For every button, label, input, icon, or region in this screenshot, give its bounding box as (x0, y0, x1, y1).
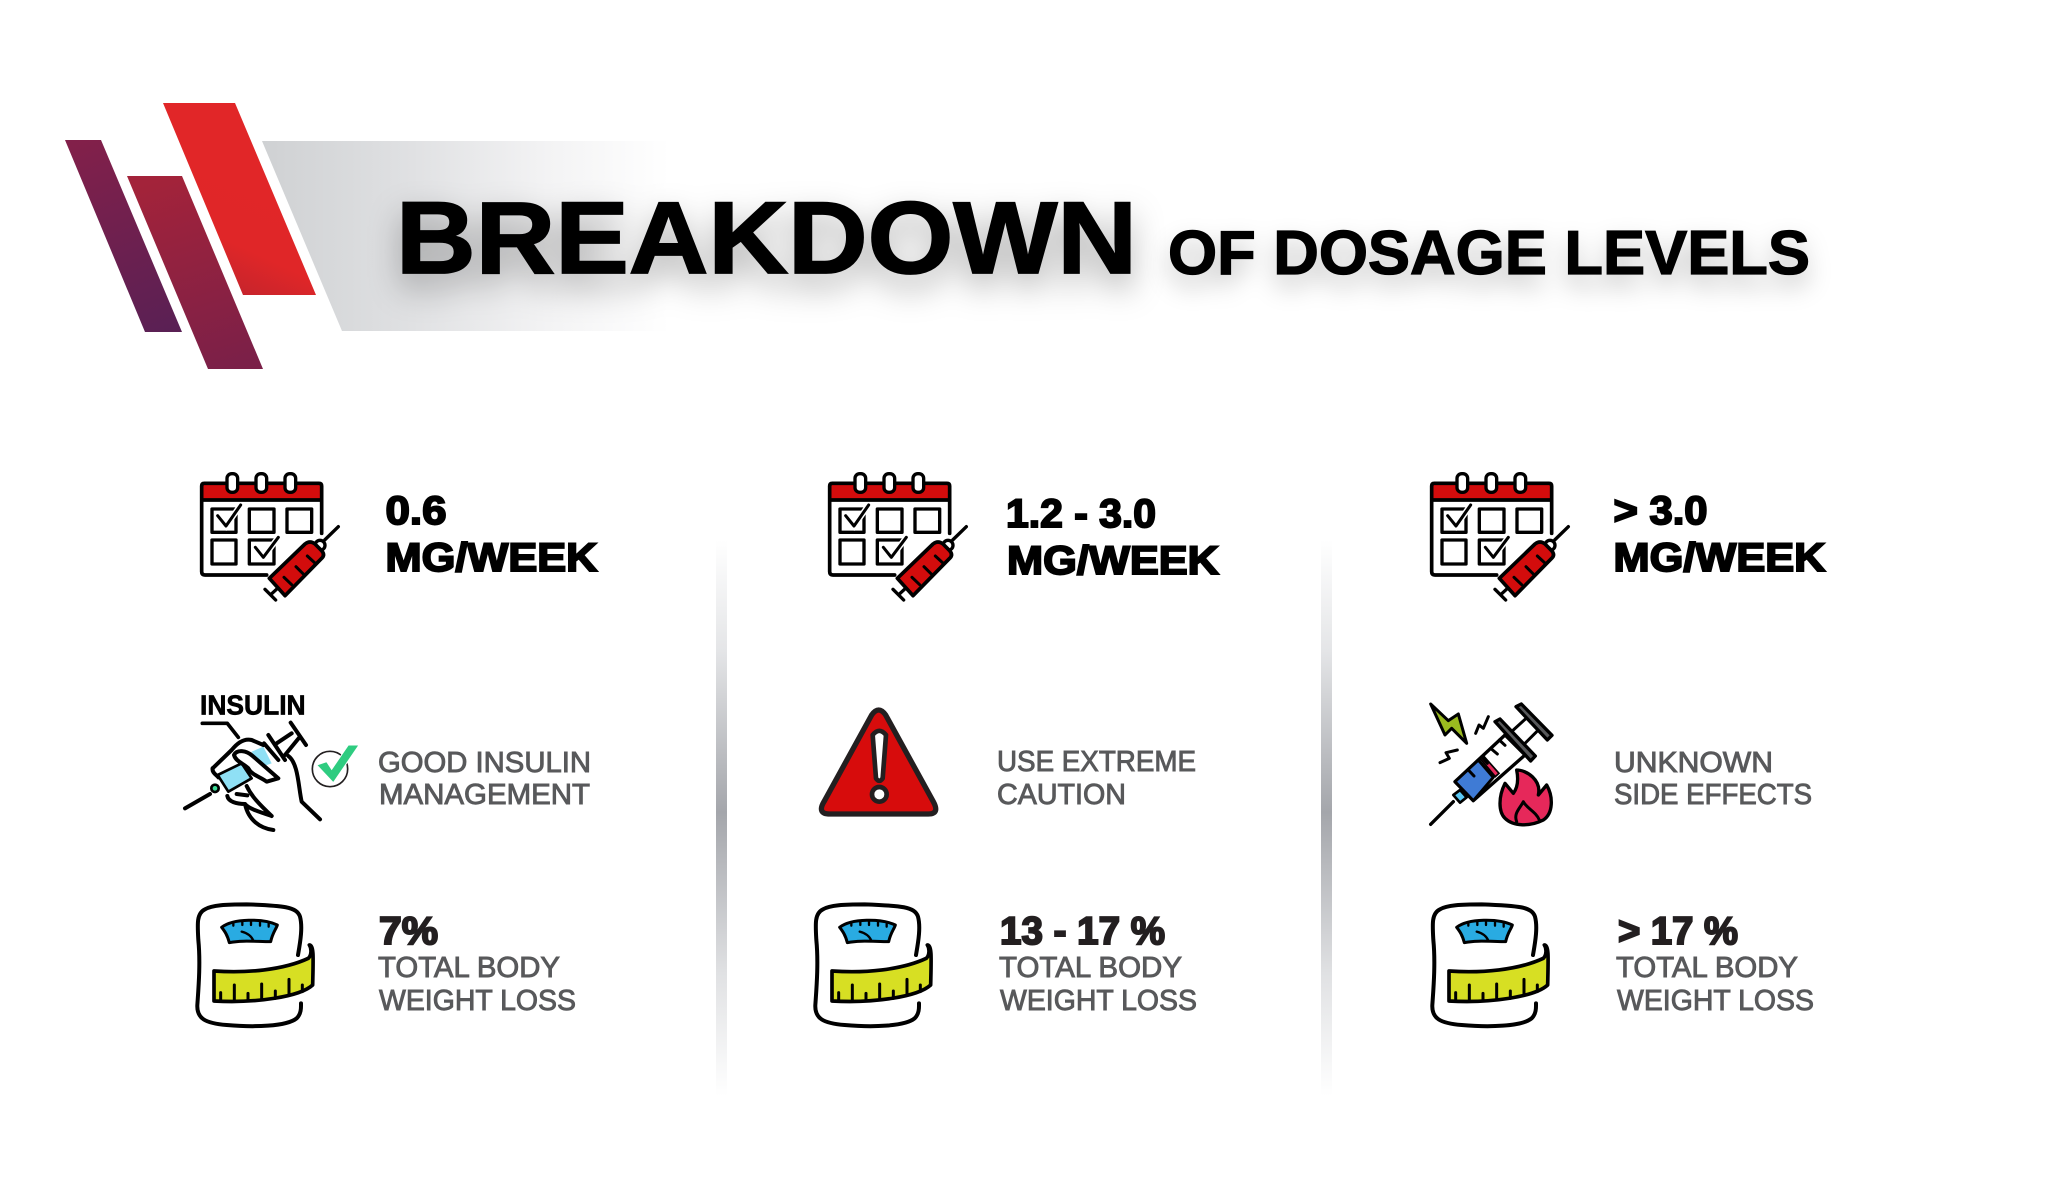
caution text: USE EXTREME (997, 746, 1196, 778)
dose heading (1006, 492, 1219, 583)
weight loss text (1616, 910, 1814, 1017)
icon: scale with tape (197, 904, 313, 1026)
dose heading: > 3.0 (1614, 489, 1708, 533)
banner gradient (262, 141, 670, 331)
weight loss text: WEIGHT LOSS (1617, 985, 1814, 1017)
title: BREAKDOWN (396, 181, 1137, 295)
weight loss text: WEIGHT LOSS (1000, 985, 1197, 1017)
icon: calendar with syringe (1432, 474, 1568, 600)
panel: 1.2 - 3.0 mg/week column (815, 474, 1219, 1026)
weight loss text (378, 910, 576, 1017)
dose heading: 0.6 (386, 489, 446, 533)
weight loss text: TOTAL BODY (1616, 952, 1798, 984)
icon: calendar with syringe (830, 474, 966, 600)
side effects text: SIDE EFFECTS (1614, 779, 1812, 811)
caution text: CAUTION (997, 779, 1126, 811)
dose heading (1614, 489, 1826, 580)
column divider left (716, 540, 727, 1096)
benefit text: GOOD INSULIN (378, 747, 591, 779)
weight loss text: WEIGHT LOSS (379, 985, 576, 1017)
icon: insulin syringe in hand: INSULIN (200, 689, 306, 720)
weight loss text: 7% (379, 910, 438, 953)
icon: warning triangle (821, 710, 936, 814)
side effects text (1614, 747, 1812, 811)
benefit text (378, 747, 591, 811)
title (396, 181, 1810, 295)
icon: scale with tape (815, 904, 931, 1026)
caution text (997, 746, 1196, 811)
panel: 0.6 mg/week column (185, 474, 598, 1026)
weight loss text: TOTAL BODY (378, 952, 560, 984)
dose heading: 1.2 - 3.0 (1006, 492, 1156, 536)
weight loss text (999, 910, 1197, 1017)
dose heading: MG/WEEK (1614, 536, 1826, 580)
title: OF DOSAGE LEVELS (1168, 219, 1810, 288)
icon: scale with tape (1432, 904, 1548, 1026)
column divider right (1321, 540, 1332, 1096)
weight loss text: TOTAL BODY (999, 952, 1182, 984)
weight loss text: > 17 % (1618, 910, 1738, 953)
icon: syringe with side effects (1431, 704, 1552, 825)
dose heading (386, 489, 598, 580)
header banner (65, 103, 1810, 369)
icon: calendar with syringe (202, 474, 338, 600)
side effects text: UNKNOWN (1614, 747, 1773, 779)
dose heading: MG/WEEK (1007, 539, 1219, 583)
benefit text: MANAGEMENT (379, 779, 590, 811)
panel: over 3.0 mg/week column (1431, 474, 1826, 1026)
dose heading: MG/WEEK (386, 536, 598, 580)
logo stripes (65, 103, 316, 369)
icon: insulin syringe in hand (185, 689, 359, 830)
weight loss text: 13 - 17 % (1000, 910, 1165, 953)
